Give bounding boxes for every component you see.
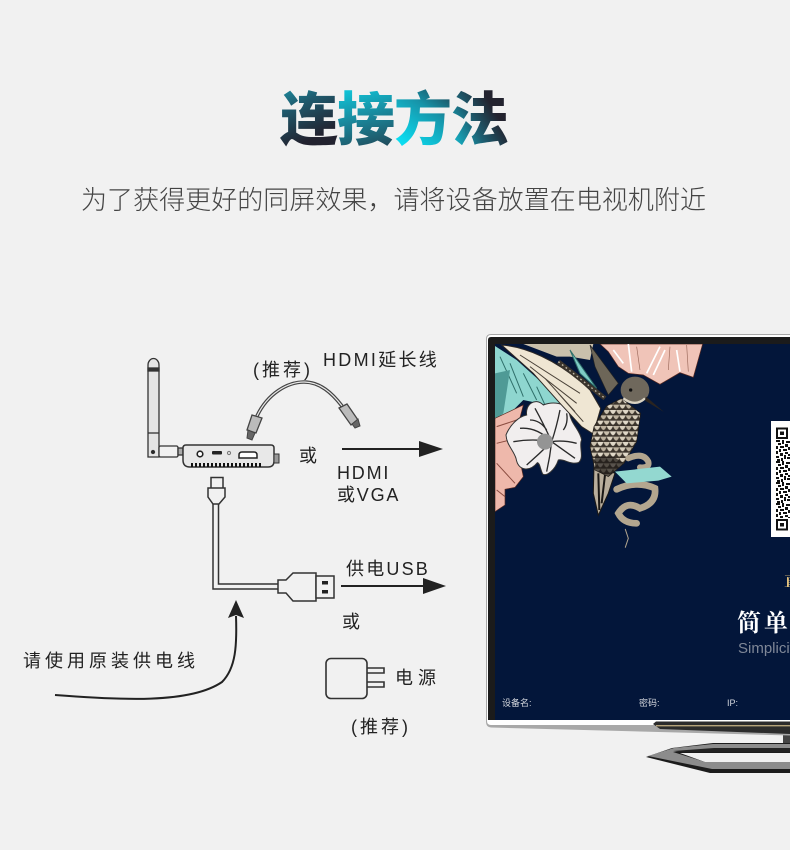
- label: HDMI extension cable: HDMI延长线: [323, 350, 439, 370]
- stand: [646, 733, 790, 773]
- upper wing: [590, 345, 618, 395]
- illustration: hummingbird and flowers: [495, 344, 703, 547]
- screen text: device info: 密码:: [639, 697, 660, 708]
- label: HDMI or VGA: HDMI: [337, 463, 390, 483]
- label: recommended: (推荐): [253, 360, 313, 380]
- tan ribbon: [617, 456, 655, 547]
- pink petals top: [600, 344, 703, 384]
- beige petals top: [523, 344, 593, 360]
- icon: HDMI extension cable: [247, 382, 360, 440]
- wing: [502, 345, 601, 434]
- screen text: simplicity heading: 简单: [737, 610, 790, 637]
- screen text: device info: [502, 697, 738, 708]
- icon: USB plug: [278, 573, 334, 601]
- screen frame: [486, 334, 790, 736]
- teal ribbon: [615, 467, 672, 483]
- label: use original power cable: 请使用原装供电线: [23, 651, 199, 671]
- connection diagram: [23, 350, 446, 737]
- icon: wireless dongle: [183, 445, 279, 467]
- teal leaves: [495, 346, 560, 416]
- icon: antenna: [148, 358, 183, 457]
- label: recommended: (推荐): [351, 717, 411, 737]
- screen text: device info: 设备名:: [502, 697, 532, 708]
- icon: power adapter: [326, 658, 384, 698]
- beak: [645, 397, 664, 412]
- arrow: curved pointer: [55, 600, 244, 699]
- tail: [593, 465, 615, 515]
- title: [280, 73, 509, 157]
- title: 接: [337, 73, 395, 157]
- subtitle: 为了获得更好的同屏效果，请将设备放置在电视机附近: [81, 180, 706, 217]
- title: 连: [280, 73, 338, 157]
- body shadow: [595, 457, 624, 477]
- title: 法: [451, 73, 509, 157]
- pink petals left: [495, 405, 523, 512]
- label: or: 或: [342, 612, 360, 632]
- label: USB power: 供电USB: [346, 559, 430, 579]
- label: power adapter: 电源: [395, 668, 441, 688]
- white flower: [506, 402, 582, 475]
- screen text: device info: IP:: [727, 698, 738, 708]
- head: [621, 377, 649, 403]
- label: or: 或: [299, 446, 317, 466]
- screen: [495, 344, 790, 720]
- arrow: USB power: [341, 578, 446, 594]
- arrow: HDMI output: [342, 441, 443, 457]
- body: [590, 398, 641, 477]
- title: 方: [394, 73, 452, 157]
- QR code: [771, 421, 790, 537]
- TV: [486, 334, 790, 773]
- label: HDMI or VGA: 或VGA: [337, 485, 400, 505]
- label: HDMI or VGA: [337, 463, 400, 505]
- icon: power cable with plug: [208, 478, 278, 589]
